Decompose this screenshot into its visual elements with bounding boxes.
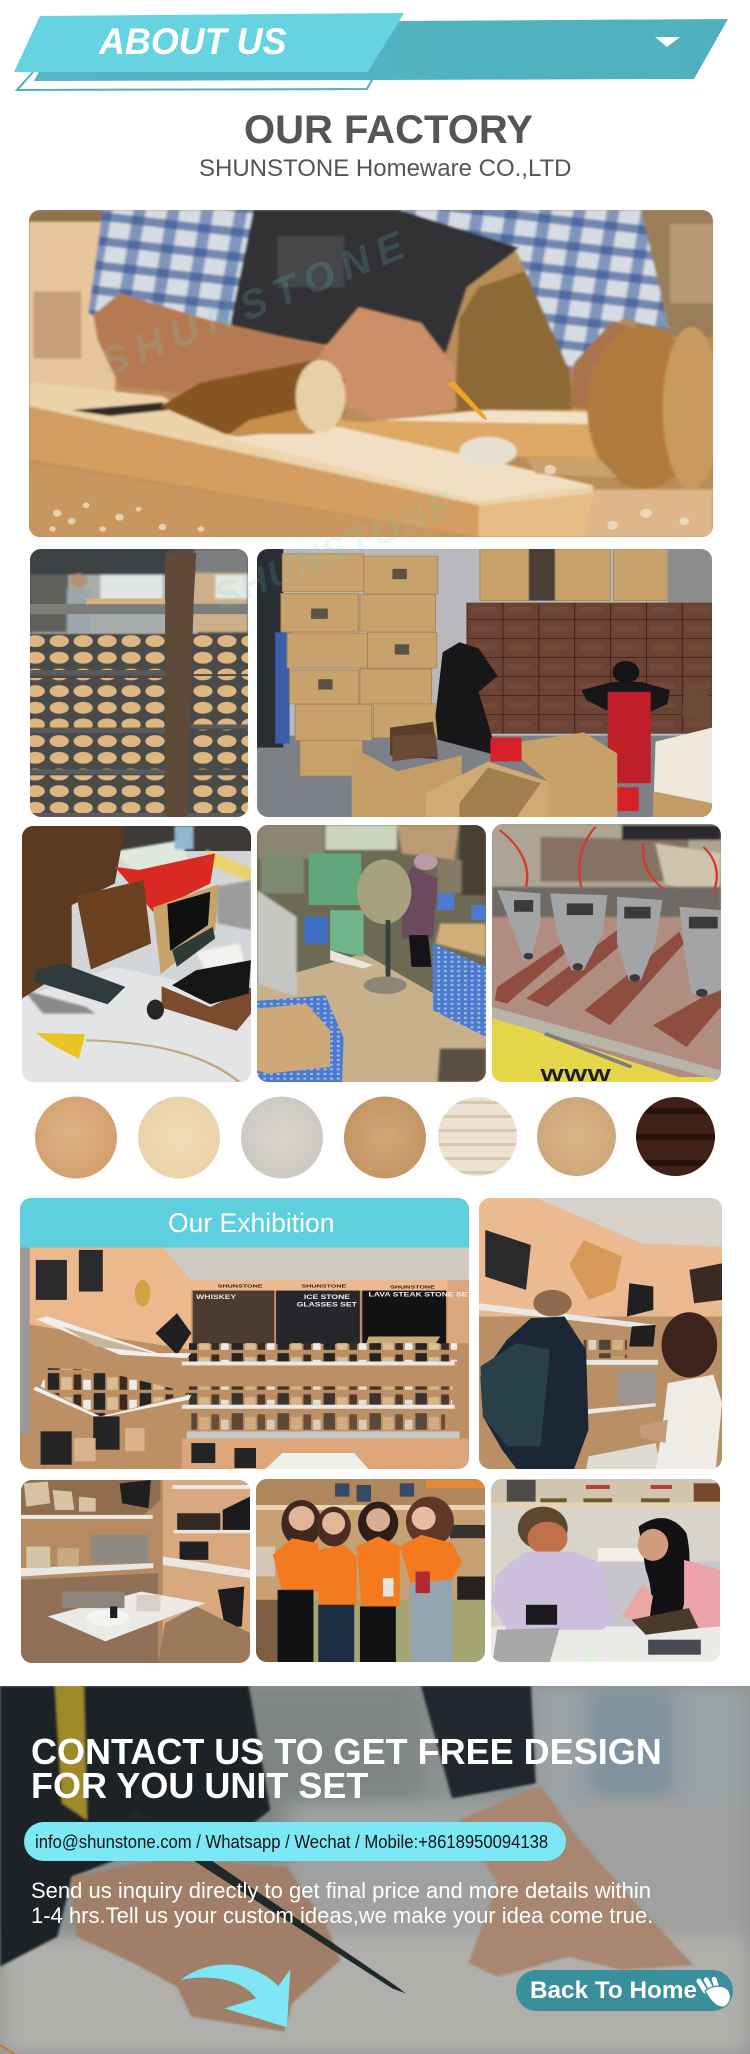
photo: visitors at booth [479,1198,722,1469]
button: back to home [516,1970,733,2011]
header banner: about us [14,13,728,91]
heading: about us: ABOUT US [99,21,286,62]
icon: pointing hand [696,1976,730,2008]
exhibition header band [20,1198,469,1247]
panel: main exhibition booth with header: SHUNSTONE [218,1284,263,1289]
panel: main exhibition booth with header: GLASSES SET [297,1301,357,1308]
staff members [273,1497,462,1662]
photo: carpenter marking wood with pencil [29,210,713,537]
heading: contact us [31,1731,662,1806]
text: inquiry message: Send us inquiry directly to get final price and more details within [31,1878,651,1903]
wood finish swatches [35,1096,715,1178]
arrow: curved pointing down [181,1964,290,2028]
photo: CNC router carving wooden boards [492,824,721,1082]
panel: contact us [0,1686,750,2054]
text: inquiry message: 1-4 hrs.Tell us your custom ideas,we make your idea come true. [31,1903,653,1928]
photo: customer meeting at table [491,1479,720,1662]
photo: booth shelves and white table [21,1480,250,1663]
heading: contact us: CONTACT US TO GET FREE DESIGN [31,1731,662,1772]
subtitle: company name: SHUNSTONE Homeware CO.,LTD [199,155,572,182]
panel: main exhibition booth with header: SHUNSTONE [301,1284,346,1289]
photo: wooden gift boxes on table [22,826,251,1082]
photo: wooden pieces drying on racks [30,549,248,817]
man in shirt [491,1507,615,1630]
photo: factory worker with fan and machines [257,825,486,1082]
watermark: shunstone on first photo: SHUNSTONE [95,220,419,385]
woman with long hair [622,1518,720,1630]
watermark: shunstone across packing photo: SHUNSTONE [208,484,461,618]
woman in white shirt [639,1312,722,1469]
panel: main exhibition booth with header: ICE STONE [304,1294,350,1301]
heading: our exhibition: Our Exhibition [168,1208,334,1238]
panel: main exhibition booth with header [20,1198,469,1469]
photo: four staff in orange polo shirts [256,1479,485,1662]
heading: contact us: FOR YOU UNIT SET [31,1765,368,1806]
photo: packing cartons and wooden boxes [257,549,712,817]
pill: contact details: info@shunstone.com / Whatsapp / Wechat / Mobile:+8618950094138 [35,1832,548,1852]
button: back to home: Back To Home [530,1977,697,2004]
man with backpack [480,1290,588,1469]
text: inquiry message [31,1878,653,1928]
panel: main exhibition booth with header: WHISKEY [196,1294,236,1301]
pill: contact details [24,1822,566,1861]
title: our factory: OUR FACTORY [244,108,533,152]
panel: main exhibition booth with header: SHUNSTONE [390,1285,435,1290]
